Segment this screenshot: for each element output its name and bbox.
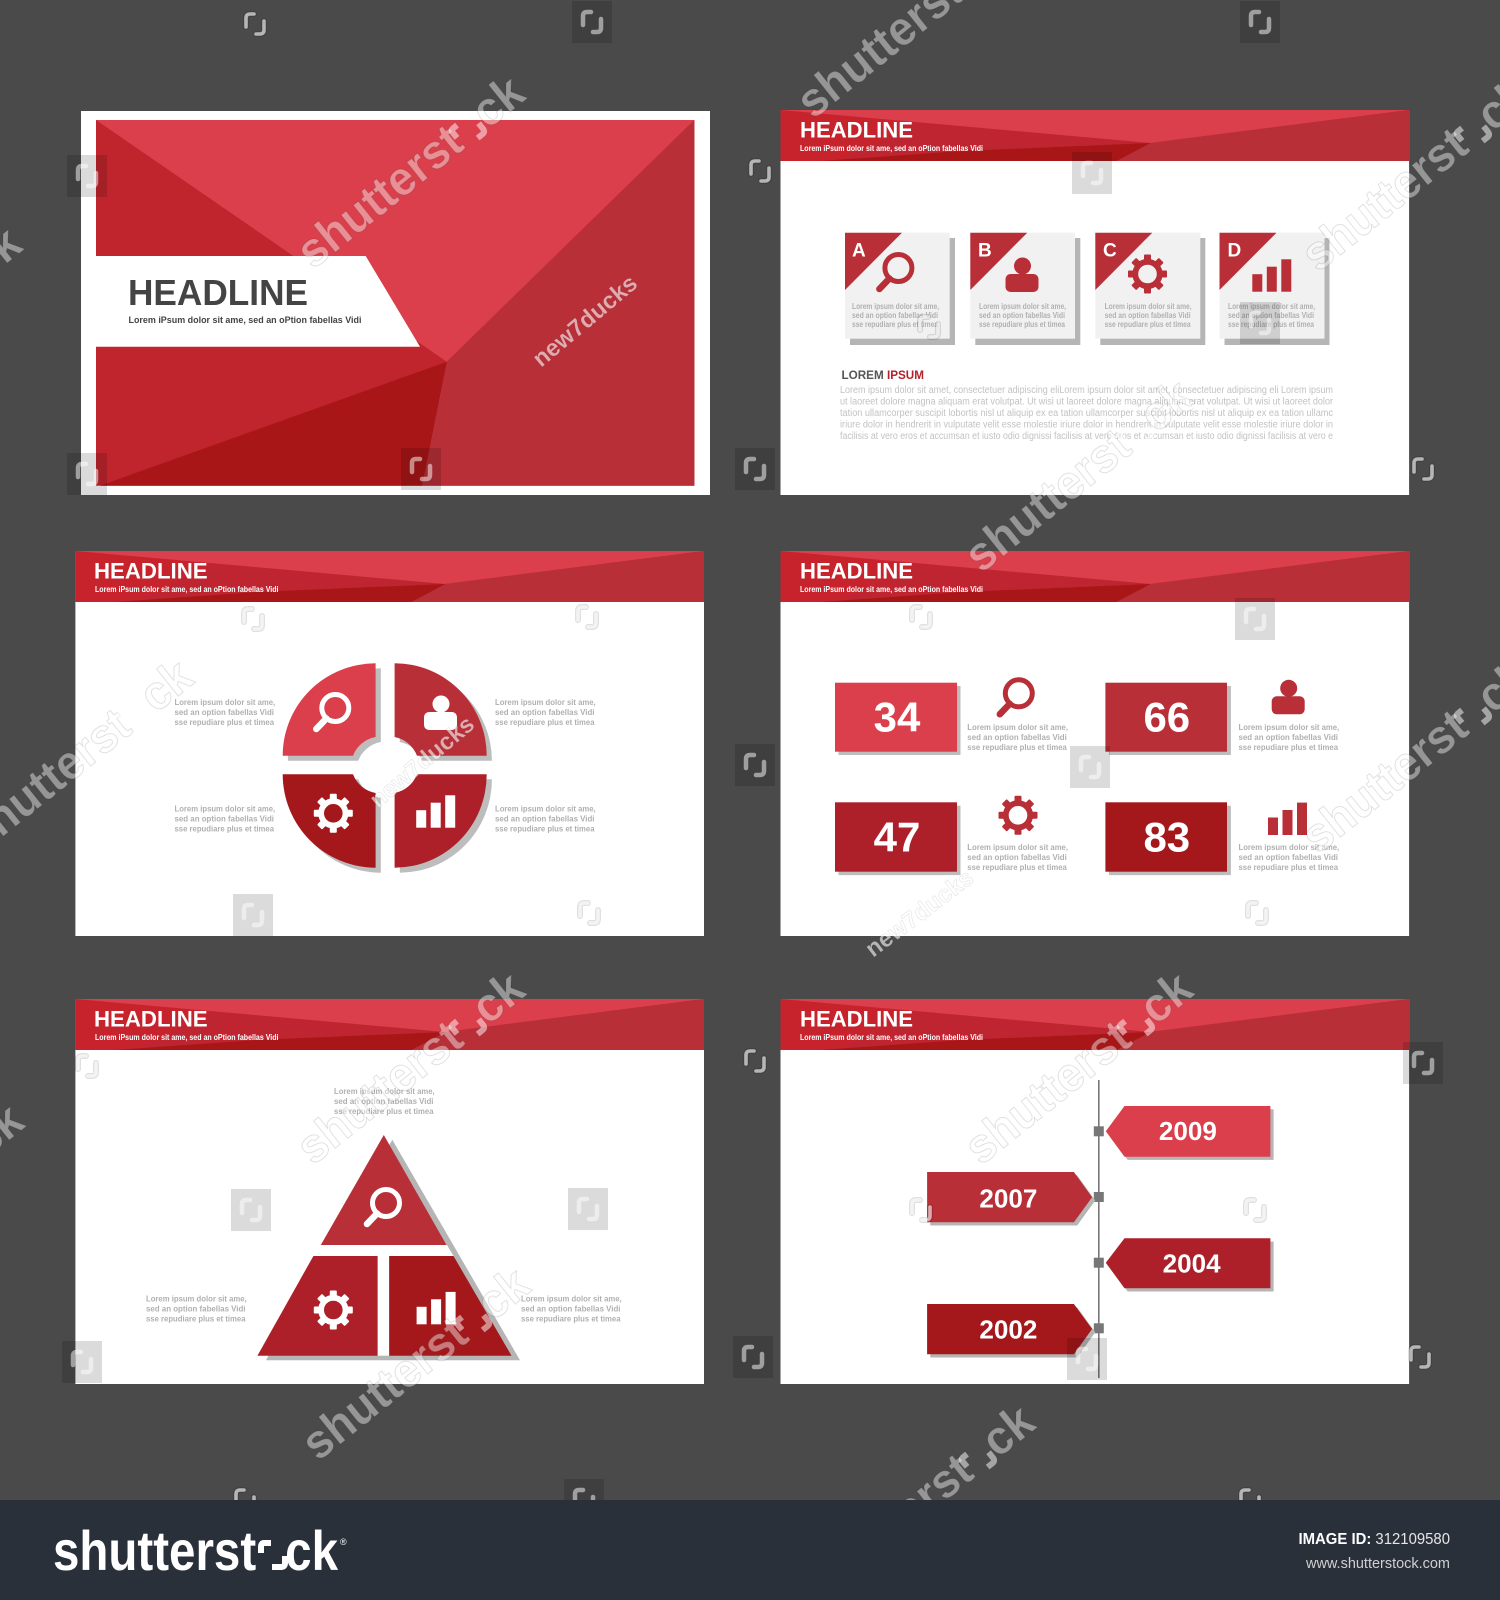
text top: Lorem ipsum dolor sit ame, [334,1087,435,1096]
text bottom right: sed an option fabellas Vidi [495,815,594,824]
slide header: HEADLINE [94,558,208,584]
flag 2009: 2009 [1159,1116,1217,1146]
stat 66 [1105,680,1339,755]
watermark wordmarks: shutterstock [292,1257,540,1471]
text top: sse repudiare plus et timea [334,1107,434,1116]
segment: gear [283,774,376,868]
slide header: Lorem iPsum dolor sit ame, sed an oPtion fabellas Vidi [800,144,983,153]
card D: D [1228,241,1241,262]
slide header: Lorem iPsum dolor sit ame, sed an oPtion fabellas Vidi [95,1033,278,1042]
pyramid top tier [321,1135,446,1245]
stat 83 [1105,802,1339,875]
body paragraph [840,385,1334,442]
stat 34 [835,680,1068,755]
stat 34: 34 [874,694,921,741]
card A: sed an option fabellas Vidi [852,311,938,320]
text top left: sed an option fabellas Vidi [174,708,274,717]
stat 83: sse repudiare plus et timea [1238,863,1339,872]
text right: sse repudiare plus et timea [521,1315,621,1324]
pyramid bottom right tier [389,1256,512,1356]
stat 47: 47 [874,814,920,861]
text top right [495,698,596,727]
text top right: sse repudiare plus et timea [495,718,595,727]
watermark wordmarks: shutterstock [287,65,535,279]
text bottom left: Lorem ipsum dolor sit ame, [174,805,275,814]
segment: bars [395,774,487,868]
watermark wordmarks: shutterstock [287,961,535,1175]
text bottom left: sed an option fabellas Vidi [174,815,274,824]
lorem ipsum heading: LOREM IPSUM [842,368,924,382]
slide header [780,551,1409,602]
stat 47: sed an option fabellas Vidi [967,853,1067,862]
panel: circle diagram slide [75,551,704,936]
text left: sed an option fabellas Vidi [146,1305,246,1314]
text left: sse repudiare plus et timea [146,1315,246,1324]
watermark wordmarks: shutterstock [955,961,1203,1175]
cover title band [96,256,420,347]
text top right: Lorem ipsum dolor sit ame, [495,698,596,707]
stat 66: sed an option fabellas Vidi [1238,733,1338,742]
card A: sse repudiare plus et timea [852,320,938,329]
pyramid shadow [266,1140,520,1360]
card B: sse repudiare plus et timea [979,320,1065,329]
slide background [75,999,704,1384]
card B: sed an option fabellas Vidi [979,311,1065,320]
cover white frame [81,111,710,495]
text top right: sed an option fabellas Vidi [495,708,594,717]
card D: sse repudiare plus et timea [1228,320,1314,329]
panel: cover slide [81,111,710,495]
text top left: Lorem ipsum dolor sit ame, [174,698,275,707]
stat 83: Lorem ipsum dolor sit ame, [1238,843,1339,852]
stat 66: Lorem ipsum dolor sit ame, [1238,723,1339,732]
footer background [0,1500,1500,1600]
contributor watermarks [365,270,979,963]
text left: Lorem ipsum dolor sit ame, [146,1295,247,1304]
flag 2004 [1106,1238,1274,1292]
card C: sed an option fabellas Vidi [1105,311,1191,320]
slide background [780,110,1409,495]
slide header [75,999,704,1050]
text bottom right [495,805,596,834]
body paragraph: tation ullamcorper suscipit lobortis nisl ut aliquip ex ea tation ullamcorper suscipit lobortis nisl ut aliquip ex ea tation ullamc [840,408,1333,419]
flag 2009 [1106,1106,1274,1160]
stat 34: sed an option fabellas Vidi [967,733,1067,742]
body paragraph: facilisis at vero eros et accumsan et iusto odio dignissi facilisis at vero eros et accumsan et iusto odio dignissi facilisis at vero e [840,431,1333,442]
flag 2002: 2002 [979,1314,1037,1344]
text bottom right: Lorem ipsum dolor sit ame, [495,805,596,814]
card C: sse repudiare plus et timea [1105,320,1191,329]
text bottom left [174,805,275,834]
text right: Lorem ipsum dolor sit ame, [521,1295,622,1304]
card D: Lorem ipsum dolor sit ame, [1228,302,1315,311]
circle segment shadows [288,668,492,873]
slide header: HEADLINE [800,558,913,584]
panel: pyramid slide [75,999,704,1384]
timeline axis [1094,1080,1104,1378]
slide header: HEADLINE [800,1006,913,1032]
card B: B [978,241,992,262]
card A [845,233,955,345]
stat 66: sse repudiare plus et timea [1238,743,1339,752]
slide header: Lorem iPsum dolor sit ame, sed an oPtion fabellas Vidi [800,585,983,594]
slide background [75,551,704,936]
stat 34: sse repudiare plus et timea [967,743,1067,752]
card C [1095,233,1205,345]
watermark wordmarks: shutterstock [955,369,1203,583]
text top left: sse repudiare plus et timea [174,718,275,727]
card B: Lorem ipsum dolor sit ame, [979,302,1066,311]
text top [334,1087,435,1116]
cover headline: HEADLINE [128,272,308,313]
segment: person [395,663,487,756]
slide header [780,999,1409,1050]
stat 47: sse repudiare plus et timea [967,863,1067,872]
stat 83: 83 [1143,814,1190,861]
card A: A [852,241,866,262]
slide header: HEADLINE [94,1006,208,1032]
card A: Lorem ipsum dolor sit ame, [852,302,939,311]
slide background [780,551,1409,936]
flag 2002 [927,1304,1095,1358]
panel: timeline slide [780,999,1409,1384]
slide header: HEADLINE [800,118,913,142]
shutterstock logo: ® [340,1537,347,1547]
card B [970,233,1080,345]
card C: Lorem ipsum dolor sit ame, [1105,302,1192,311]
text top left [174,698,275,727]
flag 2007 [927,1172,1095,1226]
segment: search [283,663,376,756]
body paragraph: Lorem ipsum dolor sit amet, consectetuer adipiscing eliLorem ipsum dolor sit amet, consectetuer adipiscing eli Lorem ipsum [840,385,1333,396]
card D [1220,233,1330,345]
site url: www.shutterstock.com [1305,1555,1450,1572]
text right: sed an option fabellas Vidi [521,1305,620,1314]
text bottom right: sse repudiare plus et timea [495,825,595,834]
slide header: Lorem iPsum dolor sit ame, sed an oPtion fabellas Vidi [95,585,278,594]
image id: IMAGE ID: 312109580 [1298,1531,1450,1548]
shutterstock logo: shutterstock [53,1519,339,1582]
contributor watermarks: new7ducks [528,270,643,373]
body paragraph: ut laoreet dolore magna aliquam erat volutpat. Ut wisi ut laoreet dolore magna aliquam erat volutpat. Ut wisi ut laoreet dolor [840,396,1334,408]
pyramid bottom left tier [257,1256,378,1356]
slide header [780,110,1409,161]
card D: sed an option fabellas Vidi [1228,311,1314,320]
slide header [75,551,704,602]
flag 2004: 2004 [1163,1249,1221,1279]
text top: sed an option fabellas Vidi [334,1097,434,1106]
card C: C [1103,241,1117,262]
text right [521,1295,622,1324]
panel: ABCD cards slide [780,110,1409,495]
stat 47 [835,796,1068,875]
stat 66: 66 [1143,694,1190,741]
slide header: Lorem iPsum dolor sit ame, sed an oPtion fabellas Vidi [800,1033,983,1042]
contributor watermarks: new7ducks [860,864,979,963]
footer bar [0,1500,1500,1600]
text left [146,1295,247,1324]
stat 47: Lorem ipsum dolor sit ame, [967,843,1068,852]
stat 83: sed an option fabellas Vidi [1238,853,1338,862]
body paragraph: iriure dolor in hendrerit in vulputate velit esse molestie iriure dolor in hendrerit in vulputate velit esse molestie iriure dolor in [840,420,1333,430]
contributor watermarks: new7ducks [365,711,480,814]
text bottom left: sse repudiare plus et timea [174,825,275,834]
panel: numbers slide [780,551,1409,936]
stat 34: Lorem ipsum dolor sit ame, [967,723,1068,732]
cover subtitle: Lorem iPsum dolor sit ame, sed an oPtion fabellas Vidi [128,315,362,325]
pyramid gaps [255,1135,454,1356]
slide background [780,999,1409,1384]
flag 2007: 2007 [979,1183,1037,1213]
cover polygon artwork [96,120,694,486]
